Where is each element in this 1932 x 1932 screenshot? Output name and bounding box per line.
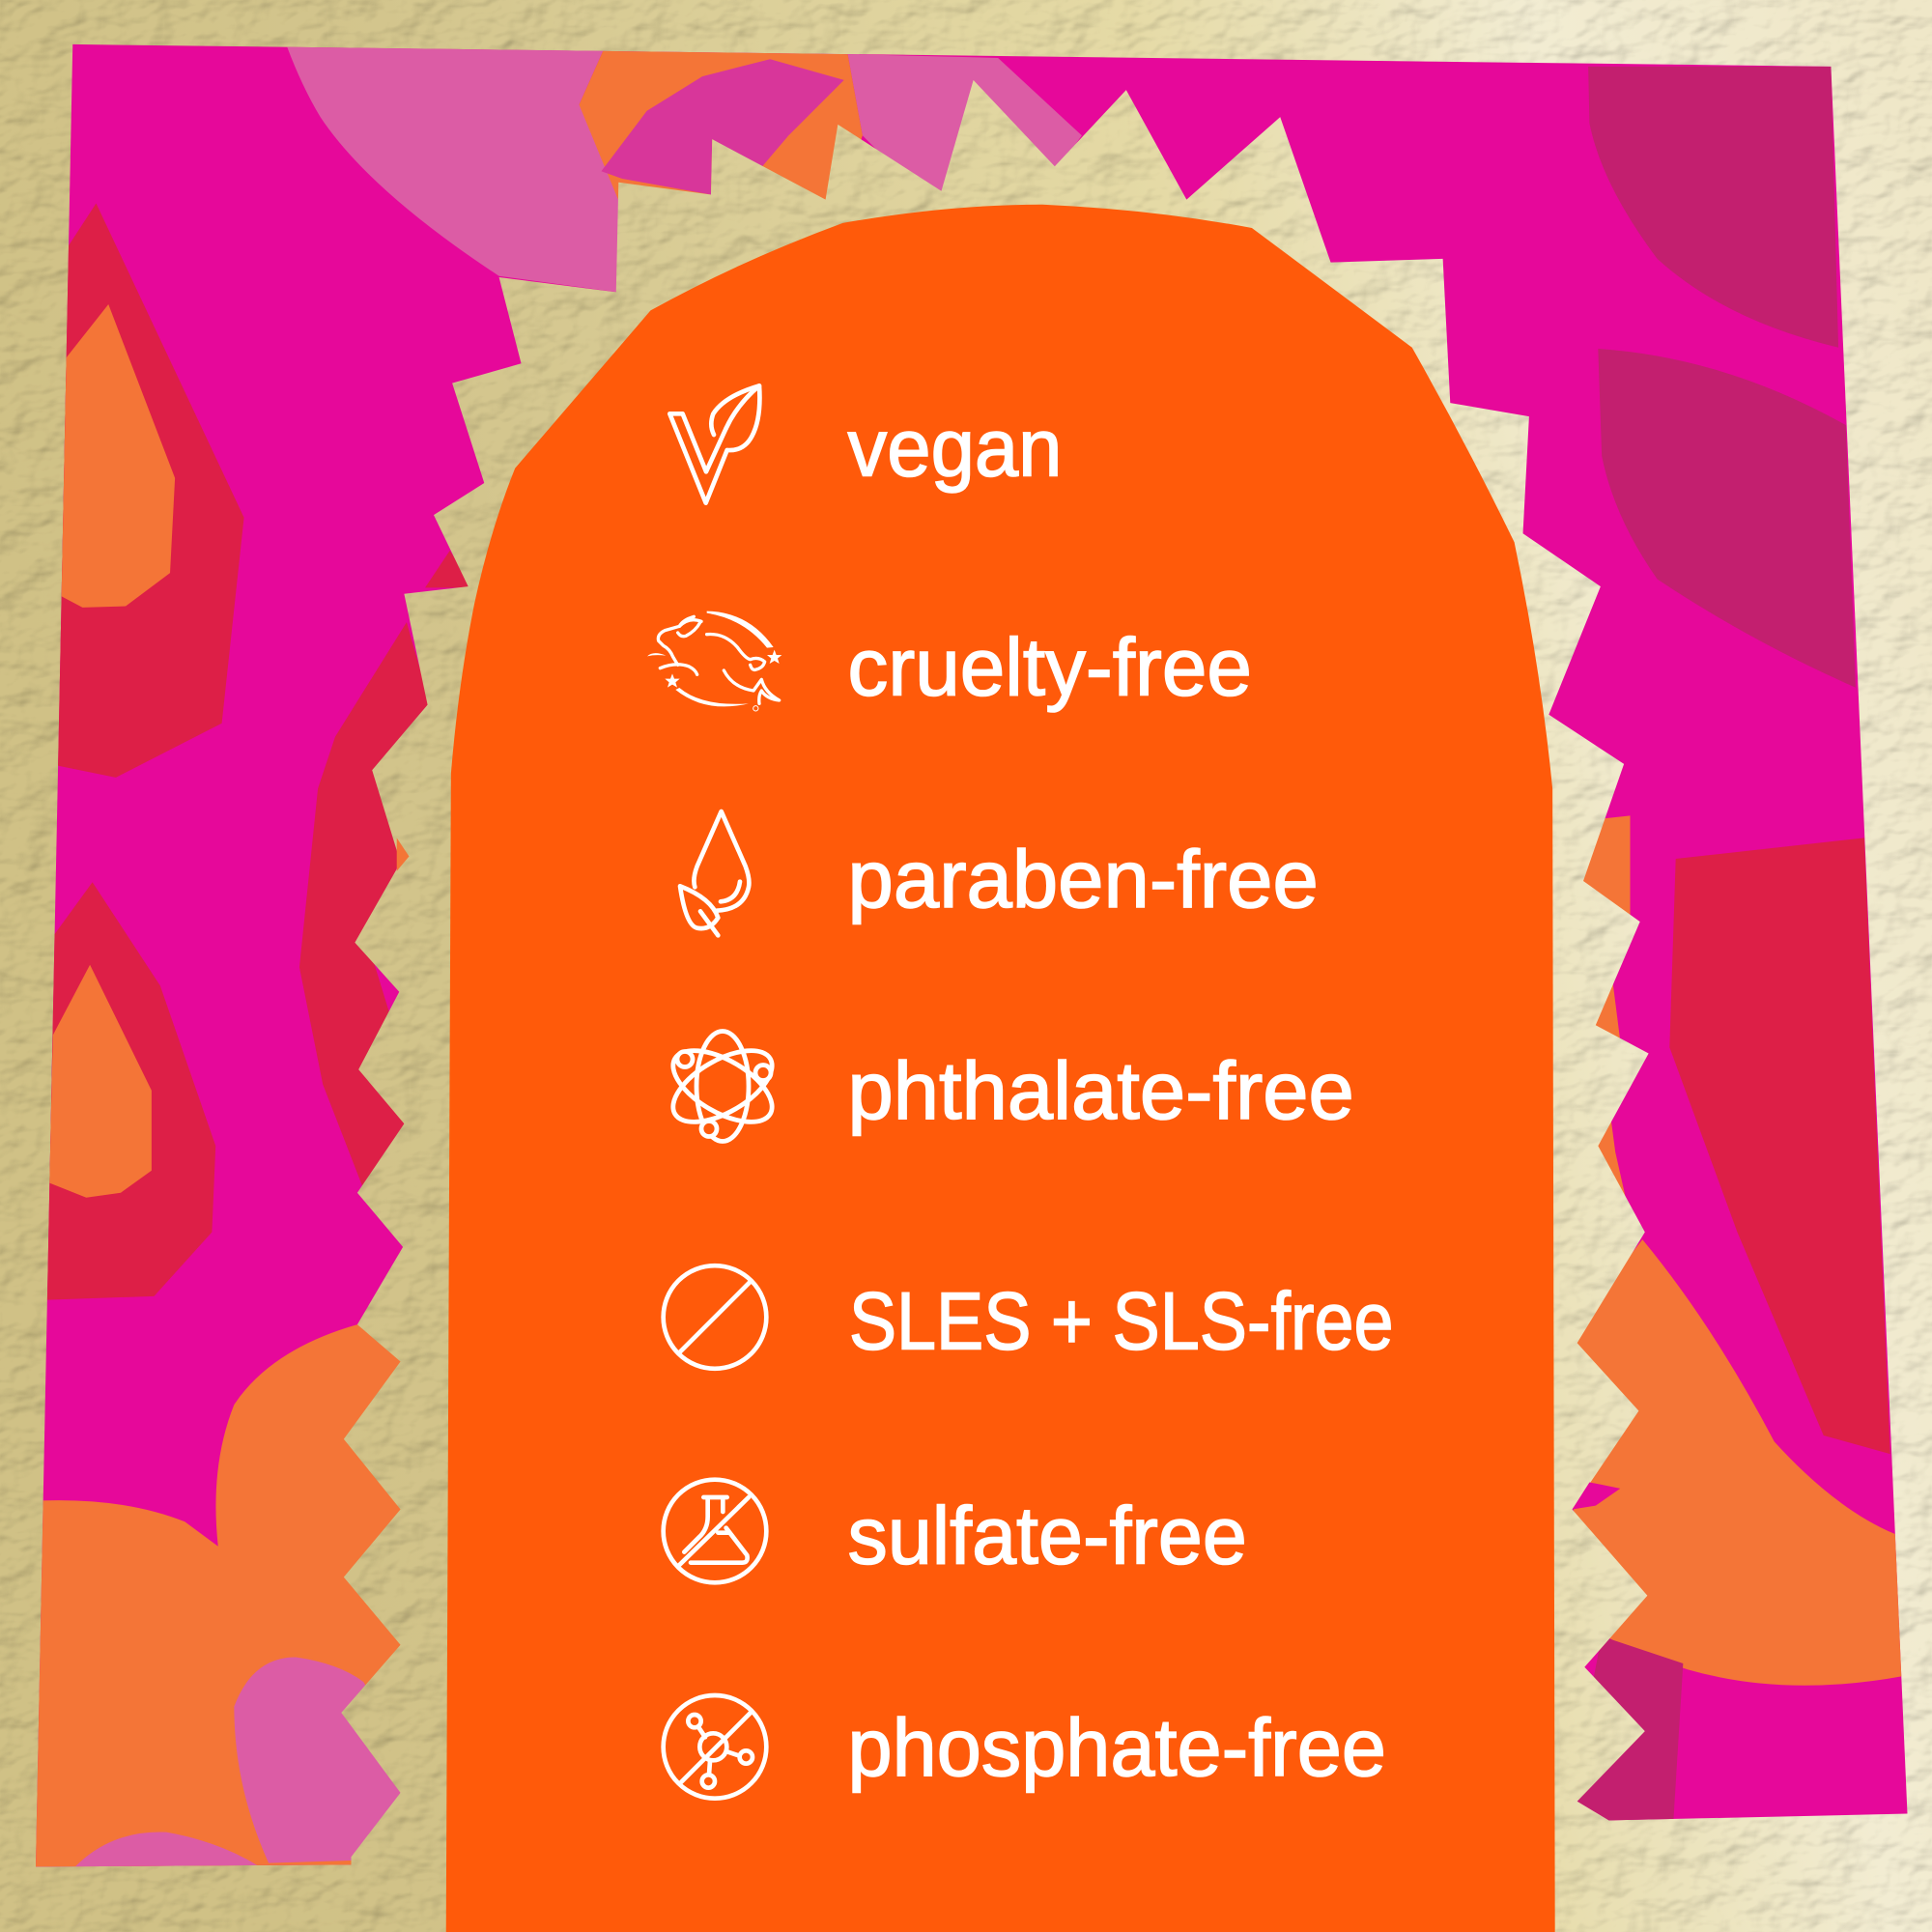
- shape: top orange: [579, 49, 863, 210]
- magenta sliver: [1573, 1482, 1620, 1509]
- list: claims: [647, 385, 1394, 1799]
- icon: no molecule: [664, 1695, 766, 1799]
- shape: bottom left pink sliver: [74, 1833, 261, 1868]
- shape: top magenta leaf: [601, 59, 844, 195]
- shape: right sliver orange lower: [1589, 1115, 1627, 1202]
- shape: bottom left pink: [234, 1658, 419, 1863]
- icon: vegan leaf V: [669, 385, 759, 503]
- shape: right dark leaf: [1598, 349, 1856, 688]
- shape: left orange drop one: [59, 304, 175, 608]
- label: cruelty-free: cruelty-free: [848, 621, 1252, 712]
- shape: right red: [1669, 838, 1890, 1454]
- shape: middle red band: [299, 622, 431, 1189]
- shape: top centre pink: [848, 54, 1082, 191]
- icon: atom: [662, 1032, 783, 1142]
- label: paraben-free: paraben-free: [848, 834, 1319, 924]
- orange arch panel: [446, 205, 1555, 1932]
- orange tip: [397, 838, 409, 871]
- shape: right sliver orange: [1583, 974, 1620, 1041]
- icon: leaping rabbit: [647, 611, 781, 711]
- label: SLES + SLS-free: SLES + SLS-free: [849, 1276, 1394, 1367]
- icon: drop with leaf: [680, 811, 749, 935]
- label: vegan: vegan: [848, 402, 1062, 493]
- shape: left orange drop two: [49, 965, 152, 1198]
- shape: top right dark: [1588, 67, 1838, 348]
- label: phthalate-free: phthalate-free: [848, 1045, 1354, 1136]
- shape: bottom left orange: [25, 1324, 419, 1873]
- shape: bottom right dark: [1565, 1636, 1683, 1824]
- icon: no flask: [664, 1480, 766, 1582]
- label: phosphate-free: phosphate-free: [848, 1702, 1386, 1793]
- shape: top pink arc: [287, 46, 629, 292]
- icon: prohibited circle: [664, 1265, 766, 1369]
- shape: left red drop two: [46, 882, 215, 1300]
- shape: small red triangle: [425, 551, 474, 587]
- shape: left red drop one: [55, 203, 244, 778]
- shape: right small orange: [1565, 815, 1631, 918]
- label: sulfate-free: sulfate-free: [848, 1491, 1247, 1581]
- shape: right orange band: [1552, 1239, 1905, 1686]
